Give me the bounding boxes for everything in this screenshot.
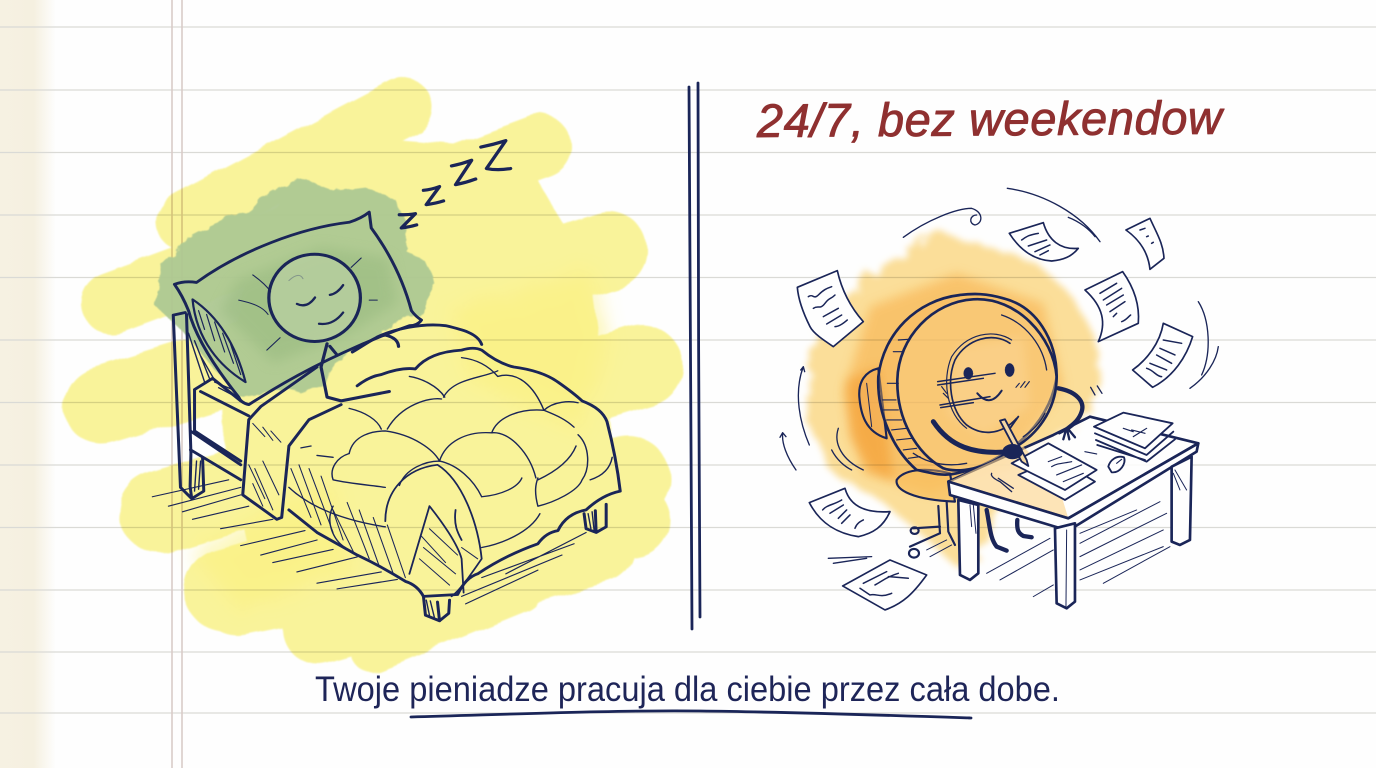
handwritten title: 24/7, bez weekendow	[756, 91, 1225, 147]
floor shading	[152, 480, 586, 604]
paper on desk, stack and eraser	[991, 413, 1175, 500]
stick body and arm	[321, 335, 399, 401]
caption underline	[411, 711, 971, 718]
sleeping face	[269, 254, 360, 341]
euro coin character	[878, 294, 1057, 475]
pillow	[174, 212, 421, 405]
yellow highlighter strokes behind bed	[102, 107, 642, 650]
illustration: sleeping figure in bed	[152, 141, 620, 621]
office chair	[859, 368, 955, 558]
caption sentence: Twoje pieniadze pracuja dla ciebie przez cała dobe.	[315, 670, 1060, 709]
pen and writing hand	[1000, 417, 1028, 466]
swirl and motion lines	[780, 188, 1218, 563]
quilt seams	[249, 358, 612, 596]
coin arms and legs	[933, 388, 1082, 551]
green watercolor behind pillow	[156, 179, 435, 397]
paper writing marks	[808, 228, 1182, 596]
blanket and quilt	[243, 325, 620, 596]
red margin lines	[172, 0, 182, 768]
center divider double line	[689, 83, 700, 629]
bed legs	[423, 504, 606, 621]
flying paper sheets	[797, 218, 1193, 610]
aged paper edge	[0, 0, 56, 768]
bed headboard and frame	[173, 313, 249, 499]
illustration: euro coin working at desk	[780, 188, 1218, 610]
desk	[948, 417, 1198, 608]
orange watercolor glow	[807, 230, 1100, 573]
sleep zzzz	[399, 141, 511, 228]
